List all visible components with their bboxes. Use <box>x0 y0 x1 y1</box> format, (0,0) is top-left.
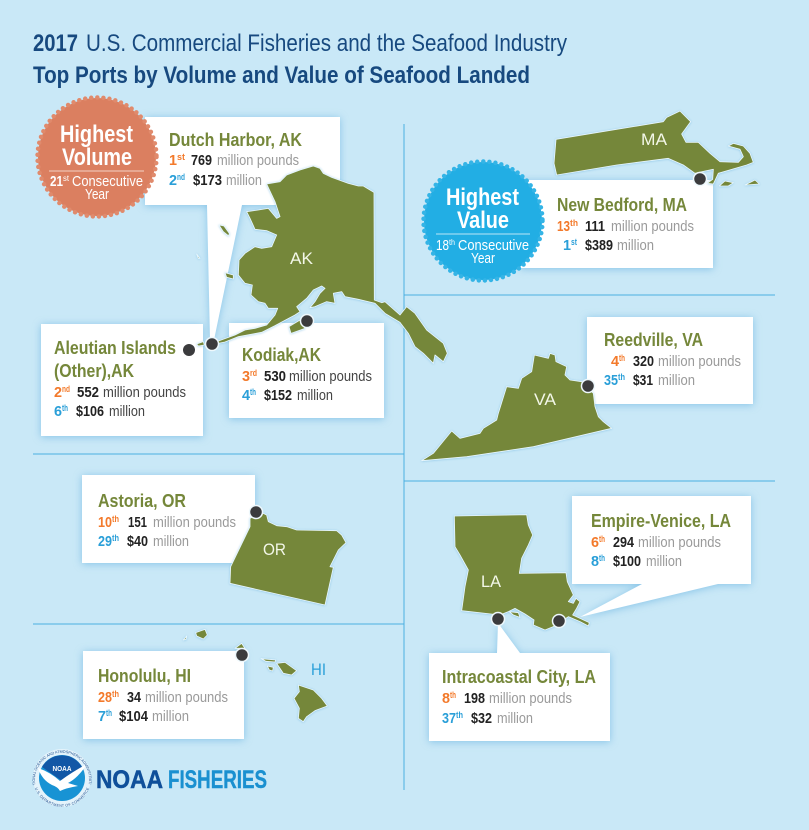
panel: Intracoastal City: 37 <box>442 710 456 727</box>
panel: Intracoastal City <box>429 623 610 741</box>
panel: Dutch Harbor: st <box>177 152 185 162</box>
panel: New Bedford: st <box>571 237 577 247</box>
marker: Aleutian Islands text dot <box>183 344 195 356</box>
panel: Astoria: $40 <box>127 534 148 550</box>
panel: Honolulu <box>83 651 244 739</box>
panel: New Bedford: million pounds <box>611 219 694 235</box>
panel: Aleutian Islands: 552 <box>77 385 99 401</box>
badge: Highest Value: Value <box>457 207 509 234</box>
title <box>33 30 567 89</box>
panel: Reedville: million <box>658 373 695 389</box>
panel: Dutch Harbor: 2 <box>169 172 177 189</box>
panel: New Bedford: th <box>570 218 578 228</box>
panel: Empire-Venice: 294 <box>613 535 634 551</box>
panel: Kodiak: million pounds <box>289 369 372 385</box>
panel: Reedville: 320 <box>633 354 654 370</box>
panel: Dutch Harbor <box>145 117 340 340</box>
panel: Dutch Harbor: million pounds <box>217 153 299 169</box>
panel: Aleutian Islands: (Other),AK <box>54 360 135 381</box>
panel: Reedville: th <box>618 372 625 382</box>
logo: NOAA seal: NATIONAL OCEANIC AND ATMOSPHERIC ADMINISTRATION <box>32 750 92 786</box>
panel: Dutch Harbor: 769 <box>191 153 212 169</box>
panel: Aleutian Islands: $106 <box>76 404 104 420</box>
panel: Intracoastal City: th <box>456 710 463 720</box>
panel: Intracoastal City: $32 <box>471 711 492 727</box>
logo: NOAA seal: NOAA <box>52 764 72 773</box>
panel: Astoria: Astoria, OR <box>98 490 186 511</box>
panel: Empire-Venice <box>572 496 751 617</box>
panel: Intracoastal City: 8 <box>442 690 450 707</box>
panel: Dutch Harbor: 1 <box>169 152 177 169</box>
panel: Kodiak: 4 <box>242 387 251 404</box>
panel: Astoria: th <box>112 514 119 524</box>
badge: Highest Volume: 21 <box>50 173 63 190</box>
panel: Honolulu: 7 <box>98 708 106 725</box>
map: Massachusetts <box>554 111 759 186</box>
panel: Honolulu: $104 <box>119 709 148 725</box>
panel: New Bedford <box>520 180 713 268</box>
panel: Honolulu: million pounds <box>145 690 228 706</box>
label: LA: LA <box>481 572 502 591</box>
panel: Kodiak: Kodiak,AK <box>242 344 322 365</box>
label: VA: VA <box>534 390 557 409</box>
logo: NOAA Fisheries wordmark: NOAA <box>96 766 163 794</box>
panel: Honolulu: 34 <box>127 690 141 706</box>
label: OR: OR <box>263 540 286 559</box>
panel: Kodiak: million <box>297 388 333 404</box>
panel: Astoria <box>82 475 255 563</box>
title: U.S. Commercial Fisheries and the Seafood Industry <box>86 30 567 57</box>
marker: Honolulu <box>236 648 248 662</box>
panel: New Bedford: 13 <box>557 218 570 235</box>
map: Oregon <box>230 513 346 605</box>
title: Top Ports by Volume and Value of Seafood Landed <box>33 62 530 89</box>
marker: Astoria <box>250 506 262 518</box>
panel: Kodiak: 3 <box>242 368 250 385</box>
panel: Empire-Venice: $100 <box>613 554 641 570</box>
panel: New Bedford: 111 <box>585 219 605 235</box>
panel: Intracoastal City: million <box>497 711 533 727</box>
badge: Highest Volume: Highest <box>60 121 133 148</box>
panel: Kodiak: 530 <box>264 369 286 385</box>
panel: Aleutian Islands: nd <box>62 384 70 394</box>
map: Virginia <box>422 353 612 461</box>
panel: Kodiak: rd <box>250 368 257 378</box>
panel: Honolulu: th <box>112 689 119 699</box>
panel: Aleutian Islands: million <box>109 404 145 420</box>
panel: Empire-Venice: 8 <box>591 553 599 570</box>
marker: Aleutian port <box>206 338 218 350</box>
panel: Reedville: 35 <box>604 372 618 389</box>
panel: Honolulu: 28 <box>98 689 112 706</box>
badge: Highest Volume: Year <box>85 186 109 203</box>
badge: Highest Value: Consecutive <box>458 237 529 254</box>
panel: Aleutian Islands: th <box>62 403 68 413</box>
badge: Highest Value: Highest <box>446 184 519 211</box>
panel: New Bedford: 1 <box>563 237 571 254</box>
badge: Highest Value: th <box>449 238 455 247</box>
panel: Astoria: million <box>153 534 189 550</box>
panel: Intracoastal City: Intracoastal City, LA <box>442 666 596 687</box>
label: AK: AK <box>290 249 314 268</box>
logo: NOAA Fisheries wordmark <box>96 766 267 794</box>
panel: Intracoastal City: 198 <box>464 691 485 707</box>
title: 2017 <box>33 30 78 57</box>
panel: Empire-Venice: th <box>599 534 605 544</box>
panel: Empire-Venice: million <box>646 554 682 570</box>
panel: Reedville: Reedville, VA <box>604 329 703 350</box>
panel: New Bedford: $389 <box>585 238 613 254</box>
panel: Reedville: million pounds <box>658 354 741 370</box>
badge: Highest Volume: Volume <box>62 144 132 171</box>
marker: Intracoastal City <box>492 612 504 626</box>
panel: New Bedford: million <box>617 238 654 254</box>
marker: New Bedford <box>694 172 706 186</box>
panel: Honolulu: th <box>106 708 112 718</box>
panel: Astoria: million pounds <box>153 515 236 531</box>
panel: Aleutian Islands: Aleutian Islands <box>54 337 176 358</box>
panel: Dutch Harbor: million <box>226 173 262 189</box>
map: Alaska <box>197 166 447 363</box>
panel: Empire-Venice: Empire-Venice, LA <box>591 510 731 531</box>
label: MA: MA <box>641 130 668 149</box>
panel: Intracoastal City: million pounds <box>489 691 572 707</box>
panel: Honolulu: Honolulu, HI <box>98 665 191 686</box>
panel: Astoria: 10 <box>98 514 112 531</box>
panel: Aleutian Islands: million pounds <box>103 385 186 401</box>
badge: Highest Value: Year <box>471 250 495 267</box>
marker: Empire-Venice <box>552 614 566 628</box>
logo: NOAA Fisheries wordmark: FISHERIES <box>168 766 267 794</box>
panel: Dutch Harbor: nd <box>177 172 185 182</box>
marker: Reedville <box>582 380 594 392</box>
badge: Highest Volume: Consecutive <box>72 173 143 190</box>
panel: Reedville: $31 <box>633 373 653 389</box>
panel: Astoria: 29 <box>98 533 112 550</box>
panel: Dutch Harbor: $173 <box>193 173 222 189</box>
panel: Aleutian Islands <box>41 324 203 436</box>
map: Louisiana <box>454 515 589 630</box>
panel: Kodiak: th <box>250 387 256 397</box>
panel: Astoria: th <box>112 533 119 543</box>
marker: Kodiak <box>300 314 314 328</box>
map: Hawaii <box>183 629 327 722</box>
badge: Highest Value <box>424 162 542 280</box>
badge: Highest Value: 18 <box>436 237 449 254</box>
panel: Dutch Harbor: Dutch Harbor, AK <box>169 129 303 150</box>
panel: Empire-Venice: 6 <box>591 534 599 551</box>
badge: Highest Volume <box>38 98 156 216</box>
panel: Honolulu: million <box>152 709 189 725</box>
panel: Aleutian Islands: 6 <box>54 403 62 420</box>
panel: Reedville <box>587 317 753 404</box>
badge: Highest Volume: st <box>63 174 70 183</box>
panel: Kodiak <box>229 323 384 418</box>
panel: Aleutian Islands: 2 <box>54 384 62 401</box>
panel: Empire-Venice: million pounds <box>638 535 721 551</box>
panel: Reedville: 4 <box>611 353 620 370</box>
logo: NOAA seal <box>32 749 92 807</box>
panel: Reedville: th <box>619 353 625 363</box>
panel: Kodiak: $152 <box>264 388 292 404</box>
panel: Astoria: 151 <box>128 515 147 531</box>
panel: Empire-Venice: th <box>599 553 605 563</box>
logo: NOAA seal: U.S. DEPARTMENT OF COMMERCE <box>35 788 89 807</box>
label: HI: HI <box>311 660 326 679</box>
panel: New Bedford: New Bedford, MA <box>557 194 687 215</box>
panel: Intracoastal City: th <box>450 690 456 700</box>
